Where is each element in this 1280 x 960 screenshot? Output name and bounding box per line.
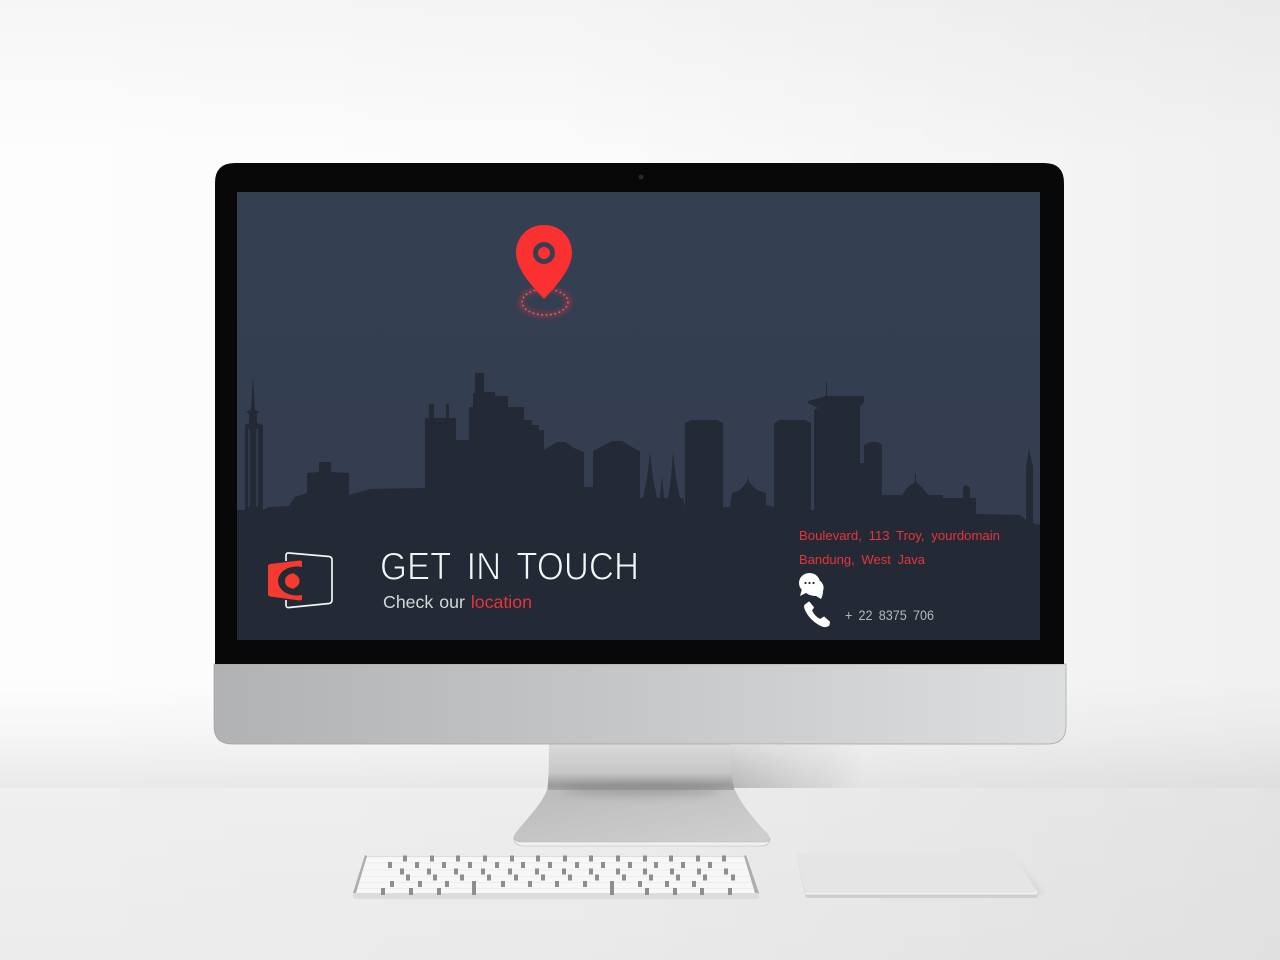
icon: chat bubbles xyxy=(799,573,824,599)
logo icon xyxy=(268,553,332,608)
trackpad xyxy=(797,853,1046,898)
monitor body xyxy=(214,163,1066,744)
keyboard xyxy=(353,855,759,899)
screen panel xyxy=(237,192,1040,640)
subtitle: Check our location xyxy=(383,592,532,612)
phone number: + 22 8375 706 xyxy=(845,607,934,623)
address line 2: Bandung, West Java xyxy=(799,552,926,567)
address line 1: Boulevard, 113 Troy, yourdomain xyxy=(799,528,1000,543)
icon: telephone xyxy=(805,602,830,627)
city skyline silhouette xyxy=(237,373,1040,640)
map pin marker xyxy=(516,225,572,315)
title: GET IN TOUCH xyxy=(380,546,639,588)
monitor stand xyxy=(514,744,770,846)
